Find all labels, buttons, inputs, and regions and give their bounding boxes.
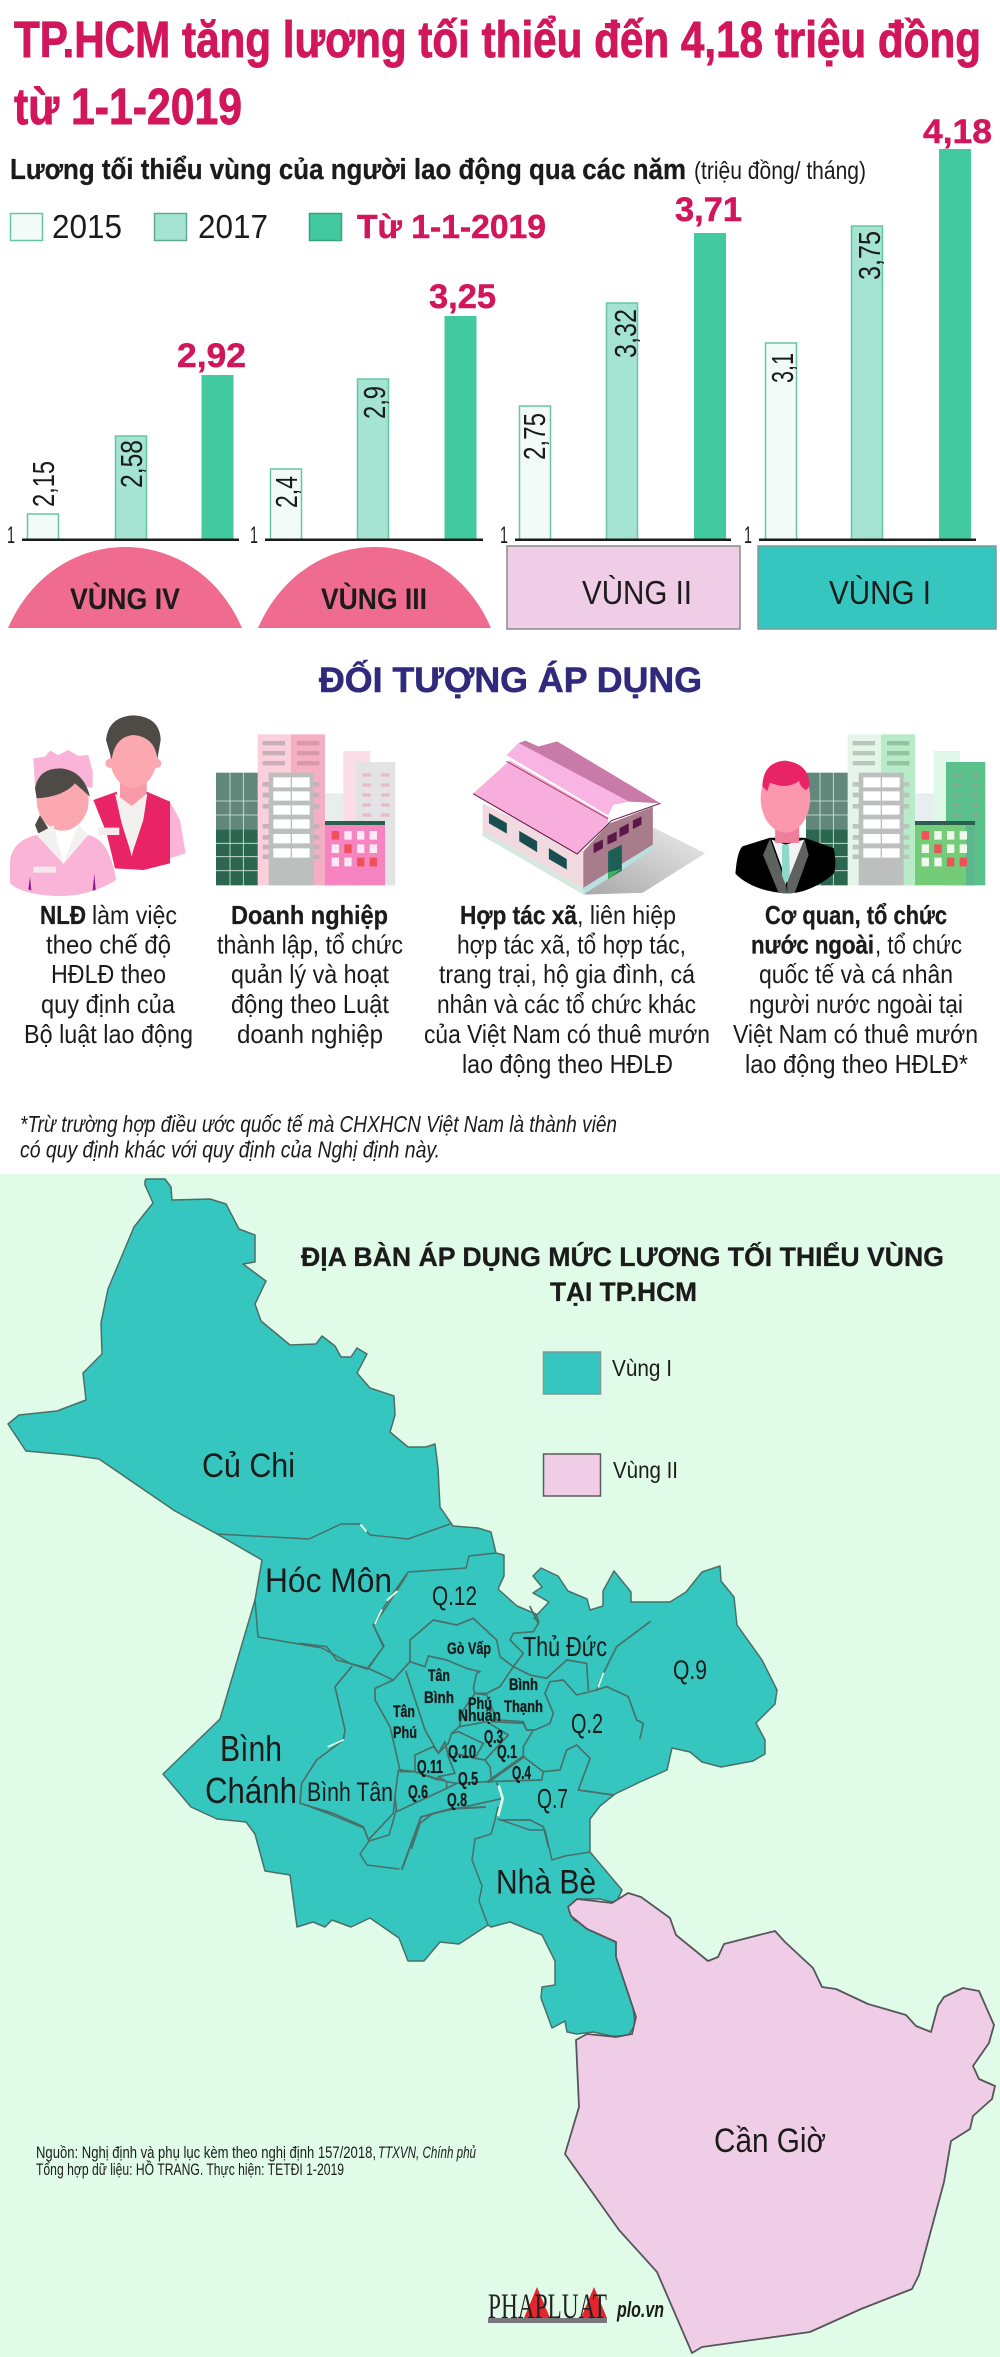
text block: workers — [24, 900, 193, 1049]
bar chart: vùng IV: 2,15 — [26, 461, 61, 507]
icon: cooperative factory — [473, 741, 705, 895]
map labels: Nhuận — [458, 1706, 501, 1725]
chart legend: Từ 1-1-2019 — [357, 208, 546, 245]
text block: foreign organisations: lao động theo HĐLĐ* — [745, 1049, 968, 1079]
text block: workers: theo chế độ — [46, 930, 171, 960]
text block: cooperatives: nhân và các tổ chức khác — [437, 989, 696, 1019]
map labels: Q.10 — [448, 1742, 476, 1762]
bar chart: vùng III — [250, 278, 496, 549]
map labels: Phú — [393, 1723, 417, 1742]
chart subtitle: Lương tối thiểu vùng của người lao động qua các năm — [10, 154, 686, 186]
text block: cooperatives: , liên hiệp — [577, 900, 676, 930]
icon: workers — [10, 715, 186, 896]
logo: Pháp Luật plo.vn: plo.vn — [616, 2297, 664, 2322]
source credits: TTXVN, Chính phủ — [378, 2144, 476, 2162]
chart legend: 2015 — [52, 208, 122, 245]
map labels: Q.11 — [417, 1757, 443, 1777]
text block: cooperatives: trang trại, hộ gia đình, cá — [439, 959, 695, 989]
bar chart: vùng IV: 2,92 — [177, 337, 246, 375]
text block: foreign organisations: quốc tế và cá nhân — [759, 959, 953, 989]
footnote: có quy định khác với quy định của Nghị định này. — [20, 1136, 440, 1162]
text block: foreign organisations: , tổ chức — [875, 930, 962, 960]
map labels: Bình — [220, 1728, 282, 1769]
map labels: Bình Tân — [307, 1777, 393, 1807]
icon: enterprise buildings — [216, 734, 395, 885]
source credits — [36, 2144, 476, 2179]
map labels: Q.2 — [571, 1708, 603, 1739]
bar chart: vùng IV: 2,58 — [114, 440, 149, 488]
map labels: Nhà Bè — [496, 1864, 596, 1902]
region badge: vùng IV — [8, 547, 242, 628]
text block: enterprises: quản lý và hoạt — [231, 959, 390, 989]
text block: workers: quy định của — [41, 989, 175, 1019]
text block: cooperatives: lao động theo HĐLĐ — [462, 1049, 673, 1079]
chart subtitle: (triệu đồng/ tháng) — [694, 157, 866, 185]
chart legend: 2017 — [198, 208, 268, 245]
map labels: Cần Giờ — [714, 2122, 826, 2160]
text block: enterprises: thành lập, tổ chức — [217, 930, 403, 960]
map labels: Q.8 — [447, 1790, 467, 1810]
footnote — [20, 1111, 617, 1162]
region badge: vùng I: VÙNG I — [829, 574, 931, 611]
text block: workers: làm việc — [92, 900, 177, 930]
map legend: Vùng II — [613, 1457, 678, 1483]
map legend: Vùng I — [612, 1355, 672, 1381]
text block: cooperatives: hợp tác xã, tổ hợp tác, — [457, 930, 686, 960]
map labels: Củ Chi — [202, 1447, 295, 1485]
bar chart: vùng I: 1 — [744, 522, 752, 549]
map labels: Q.5 — [458, 1769, 478, 1789]
map heading: TẠI TP.HCM — [550, 1277, 697, 1307]
text block: workers: Bộ luật lao động — [24, 1019, 193, 1049]
region badge: vùng III: VÙNG III — [321, 582, 427, 616]
text block: foreign organisations: Cơ quan, tổ chức — [765, 900, 947, 930]
bar chart: vùng III: 2,9 — [357, 386, 392, 419]
map labels: Q.6 — [408, 1782, 428, 1802]
text block: enterprises: Doanh nghiệp — [231, 900, 388, 930]
bar chart: vùng II: 2,75 — [517, 413, 552, 460]
text block: cooperatives: Hợp tác xã — [460, 900, 577, 930]
bar chart: vùng III: 3,25 — [429, 278, 496, 316]
map labels: Q.12 — [432, 1581, 477, 1611]
region badge: vùng IV: VÙNG IV — [70, 582, 180, 616]
text block: cooperatives: của Việt Nam có thuê mướn — [424, 1019, 710, 1049]
map labels: Tân — [428, 1666, 450, 1685]
title — [14, 11, 981, 135]
map labels: Hóc Môn — [265, 1562, 392, 1600]
text block: enterprises: động theo Luật — [231, 989, 390, 1019]
text block: foreign organisations: nước ngoài — [751, 930, 874, 960]
text block: enterprises — [217, 900, 403, 1049]
bar chart: vùng II: 3,71 — [675, 191, 742, 229]
bar chart: vùng III: 2,4 — [269, 476, 304, 508]
bar chart: vùng II: 1 — [500, 522, 508, 549]
map labels: Q.4 — [512, 1763, 531, 1783]
bar chart: vùng IV: 1 — [7, 522, 15, 549]
title: từ 1-1-2019 — [14, 78, 242, 135]
map labels — [202, 1447, 826, 2160]
region badge: vùng I — [758, 546, 996, 629]
text block: workers: HĐLĐ theo — [51, 959, 166, 989]
region badge: vùng II: VÙNG II — [582, 574, 692, 611]
text block: cooperatives — [424, 900, 710, 1079]
map labels: Thạnh — [504, 1697, 543, 1716]
map labels: Thủ Đức — [523, 1631, 607, 1662]
map labels: Q.3 — [484, 1727, 503, 1747]
map heading — [301, 1240, 944, 1307]
text block: foreign organisations: người nước ngoài tại — [749, 989, 963, 1019]
text block: workers: NLĐ — [40, 900, 86, 930]
bar chart: vùng IV — [7, 337, 246, 549]
map labels: Q.1 — [497, 1742, 517, 1762]
map labels: Bình — [509, 1675, 538, 1694]
bar chart: vùng I: 4,18 — [923, 113, 992, 151]
chart legend — [10, 208, 546, 245]
icon: man in suit — [736, 761, 835, 894]
map legend — [544, 1352, 678, 1496]
map: vùng II Cần Giờ — [565, 1893, 995, 2353]
map: vùng I districts — [8, 1179, 777, 2036]
map: inner districts — [300, 1575, 650, 1848]
map labels: Bình — [424, 1688, 454, 1707]
map labels: Q.7 — [537, 1783, 568, 1814]
map labels: Gò Vấp — [447, 1639, 491, 1658]
map labels: Chánh — [205, 1770, 297, 1811]
heading: đối tượng áp dụng: ĐỐI TƯỢNG ÁP DỤNG — [319, 660, 702, 700]
icon: foreign organisation buildings — [806, 734, 985, 885]
bar chart: vùng I: 3,1 — [765, 353, 800, 383]
bar chart: vùng II — [500, 191, 742, 549]
source credits: Nguồn: Nghị định và phụ lục kèm theo nghị định 157/2018, — [36, 2144, 376, 2162]
map labels: Phú — [468, 1694, 492, 1713]
region badge: vùng II — [507, 546, 740, 629]
bar chart: vùng I: 3,75 — [852, 231, 887, 280]
bar chart: vùng I — [744, 113, 992, 549]
map heading: ĐỊA BÀN ÁP DỤNG MỨC LƯƠNG TỐI THIỂU VÙNG — [301, 1240, 944, 1272]
text block: enterprises: doanh nghiệp — [237, 1019, 383, 1049]
region badge: vùng III — [258, 547, 491, 628]
source credits: Tổng hợp dữ liệu: HỒ TRANG. Thực hiện: TETĐI 1-2019 — [36, 2160, 344, 2179]
text block: foreign organisations — [733, 900, 978, 1079]
panel: map background — [0, 1174, 1000, 2357]
footnote: *Trừ trường hợp điều ước quốc tế mà CHXHCN Việt Nam là thành viên — [20, 1111, 617, 1137]
logo: Pháp Luật plo.vn: PHAPLUAT — [488, 2286, 607, 2326]
bar chart: vùng III: 1 — [250, 522, 258, 549]
map labels: Q.9 — [673, 1655, 707, 1685]
bar chart: vùng II: 3,32 — [608, 309, 643, 358]
map labels: Tân — [393, 1702, 415, 1721]
